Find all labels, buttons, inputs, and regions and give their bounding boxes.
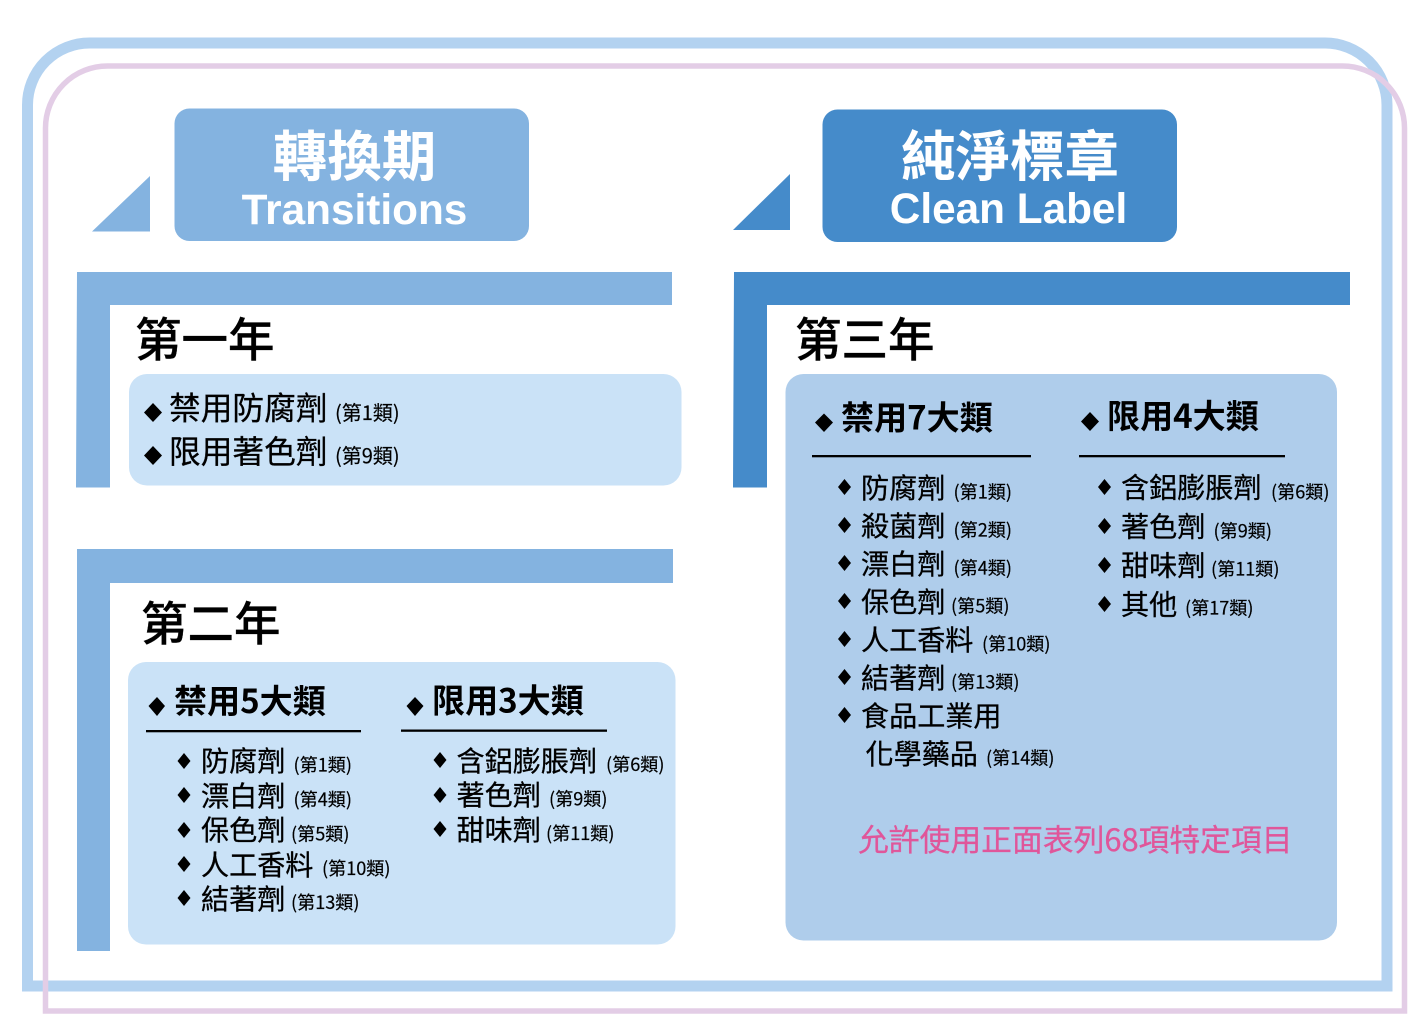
list: year three banned: (第13類) — [951, 668, 1020, 694]
list: year three banned: 殺菌劑 — [861, 504, 945, 545]
panel: year one — [76, 272, 682, 488]
list: year two restricted: 含鋁膨脹劑 — [456, 739, 597, 780]
list: year two banned: (第13類) — [291, 889, 360, 915]
list item: 禁用防腐劑: 禁用防腐劑 — [169, 384, 327, 430]
column heading: 禁用7大類 — [812, 392, 1031, 457]
callout: positive list: 允許使用正面表列68項特定項目 — [858, 815, 1293, 860]
list: year three restricted: 含鋁膨脹劑 — [1121, 466, 1261, 506]
list: year three restricted: (第9類) — [1214, 518, 1272, 544]
list: year three banned: (第5類) — [951, 592, 1009, 618]
list: year two restricted: (第11類) — [546, 820, 615, 846]
column heading: 限用3大類 — [401, 674, 607, 732]
list: year three banned: 食品工業用 — [861, 694, 1001, 735]
list: year two banned: (第5類) — [291, 820, 349, 846]
panel: transitions header — [92, 108, 529, 241]
list: year two restricted — [434, 739, 664, 849]
list: year three restricted: (第17類) — [1185, 594, 1254, 620]
content box year three — [786, 374, 1337, 940]
list: year three banned: 人工香料 — [861, 618, 973, 659]
heading: Clean Label: Clean Label — [890, 185, 1127, 232]
list: year two banned: 人工香料 — [201, 843, 313, 884]
header box: transitions — [174, 108, 529, 241]
column heading: 限用4大類: 限用4大類 — [1107, 390, 1259, 438]
list item: 限用著色劑 — [144, 427, 400, 473]
corner bracket year three — [733, 272, 1350, 488]
icon: triangle left — [92, 176, 150, 232]
list: year three banned: 結著劑 — [861, 656, 945, 697]
column heading: 禁用7大類: 禁用7大類 — [841, 392, 993, 440]
list: year three restricted: 著色劑 — [1121, 504, 1205, 546]
list: year three restricted: 其他 — [1121, 582, 1177, 624]
list: year two banned: (第1類) — [294, 752, 352, 778]
corner bracket year one — [76, 272, 672, 488]
heading: 第三年: 第三年 — [795, 304, 934, 370]
list: year two banned: 漂白劑 — [201, 774, 285, 815]
heading: 第一年: 第一年 — [135, 304, 274, 370]
panel: year two — [77, 549, 676, 951]
list: year two banned: (第4類) — [294, 786, 352, 812]
list: year two banned: 防腐劑 — [201, 739, 285, 780]
heading: 轉換期: 轉換期 — [273, 113, 436, 192]
list: year two banned: 保色劑 — [201, 808, 285, 849]
list: year three banned: (第14類) — [986, 744, 1055, 770]
panel: year three — [733, 272, 1350, 940]
list: year two banned — [178, 739, 391, 918]
column heading: 限用3大類: 限用3大類 — [432, 674, 584, 722]
corner bracket year two — [77, 549, 673, 951]
list: year three banned: 漂白劑 — [861, 542, 945, 583]
list: year three banned: (第10類) — [982, 630, 1051, 656]
list: year two restricted: 甜味劑 — [456, 808, 541, 849]
column heading: 禁用5大類: 禁用5大類 — [174, 675, 326, 723]
heading: 純淨標章: 純淨標章 — [901, 113, 1119, 192]
column heading: 禁用5大類 — [146, 675, 361, 732]
list: year three restricted: 甜味劑 — [1121, 544, 1205, 584]
list item: 禁用防腐劑 — [144, 384, 400, 430]
list: year three banned: (第4類) — [954, 554, 1012, 580]
list: year two banned: (第10類) — [322, 855, 391, 881]
list item: 限用著色劑: 限用著色劑 — [169, 427, 327, 473]
heading: Transitions: Transitions — [242, 186, 467, 233]
list: year three restricted — [1098, 466, 1329, 624]
list: year three banned: (第2類) — [954, 516, 1012, 542]
list: year three banned: 保色劑 — [861, 580, 945, 621]
header box: clean label — [822, 110, 1177, 242]
list: year three restricted: (第6類) — [1271, 478, 1329, 504]
panel: clean label header — [733, 110, 1177, 242]
list: year two restricted: (第9類) — [549, 786, 607, 812]
list: year three banned: 化學藥品 — [866, 732, 978, 773]
list: year three banned: (第1類) — [954, 478, 1012, 504]
list: year three restricted: (第11類) — [1211, 556, 1280, 582]
icon: triangle right — [733, 174, 790, 230]
content box year two — [128, 662, 676, 944]
heading: 第二年: 第二年 — [141, 588, 280, 654]
list item: 限用著色劑: (第9類) — [335, 440, 400, 469]
column heading: 限用4大類 — [1079, 390, 1285, 457]
list: year two banned: 結著劑 — [201, 877, 285, 918]
list: year two restricted: (第6類) — [606, 751, 664, 777]
content box year one — [129, 374, 682, 486]
list: year two restricted: 著色劑 — [456, 773, 541, 814]
list: year three banned: 防腐劑 — [861, 466, 945, 507]
list item: 禁用防腐劑: (第1類) — [335, 397, 400, 426]
list: year three banned — [838, 466, 1055, 773]
